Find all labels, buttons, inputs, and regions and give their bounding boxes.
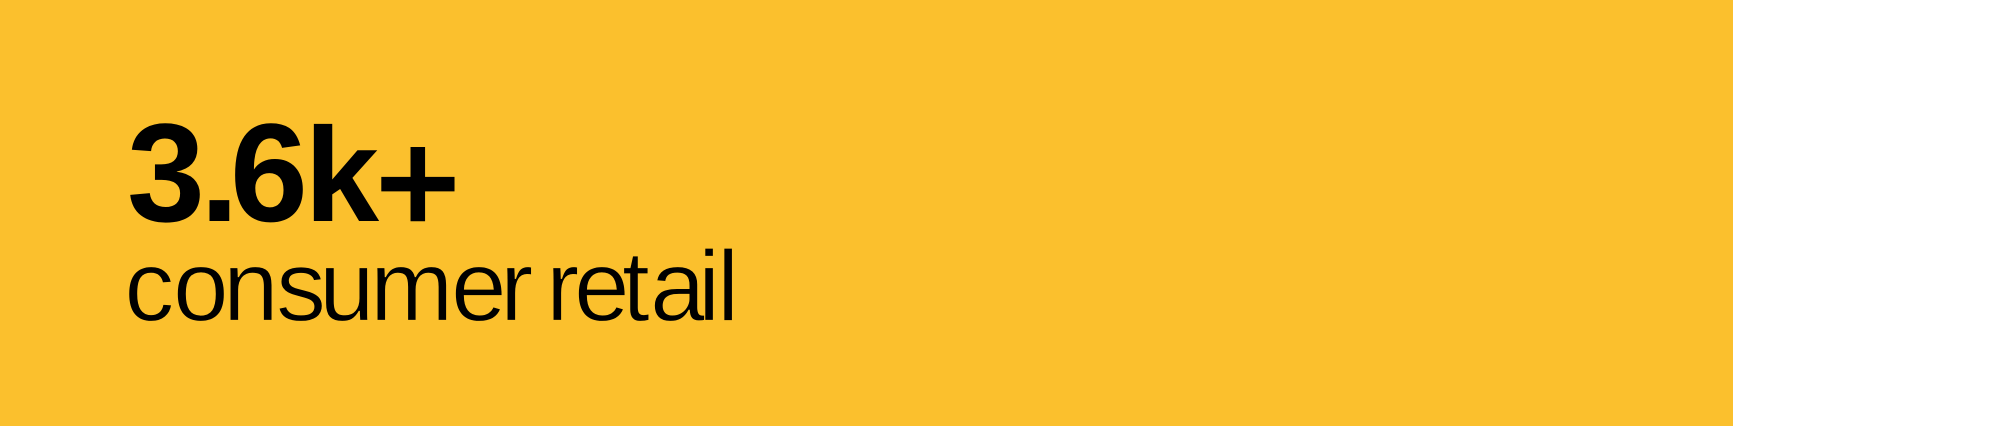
- heading: 3.6k+: 3.6: [127, 94, 308, 251]
- label: consumer retail: consumer retail: [124, 230, 739, 342]
- heading: 3.6k+: k: [304, 101, 380, 250]
- heading: 3.6k+: +: [374, 98, 462, 266]
